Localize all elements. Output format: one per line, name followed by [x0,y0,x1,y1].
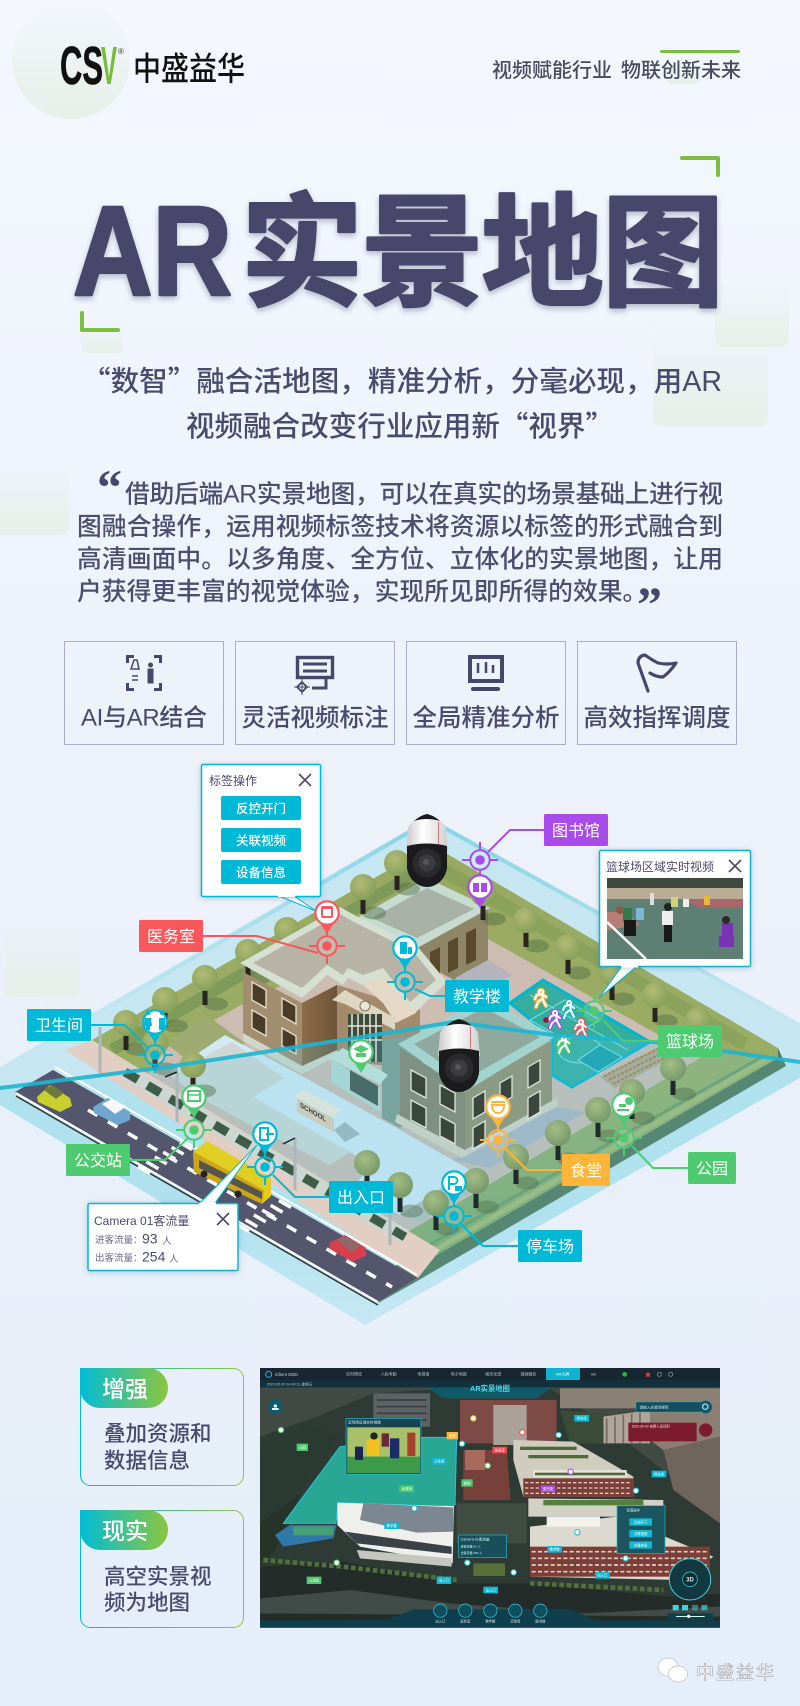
police car [93,1098,130,1125]
logo: V [101,36,117,96]
search bar [636,1402,705,1412]
map tags: 操场 [464,1480,471,1485]
map tags: 出入口 [597,1573,607,1578]
marker: 学校 [349,1040,373,1073]
3D compass [669,1559,711,1600]
panel: 增强: 叠加资源和 [104,1422,212,1446]
screen title: AR实景地图 [470,1384,510,1393]
callout: Camera 01客流量: 人 [162,1236,172,1247]
vehicles [37,1085,366,1262]
marker: 图书馆: 图书馆 [552,822,600,840]
back row trees [113,850,721,1076]
white building [337,1503,454,1563]
marker: 公园 [606,1093,736,1184]
panel: 现实: 频为地图 [104,1591,190,1615]
map tags: 教学楼 [550,1547,560,1552]
road and ground [260,1562,720,1628]
camera flow popup [459,1535,507,1558]
software screenshot: 3D [686,1578,694,1584]
camera: front [438,1019,480,1092]
map tags: 教学楼 [387,1523,397,1528]
courtyard [170,1035,470,1215]
software screenshot: 实时预览 [346,1371,362,1377]
button: 设备信息 [221,860,301,884]
slogan [492,50,741,82]
software screenshot: 请输入关键词搜索 [639,1404,669,1409]
panel: 灵活视频标注: 灵活视频标注 [242,704,388,732]
map tags: 公交站 [309,1578,320,1583]
marker: 图书馆 [462,814,608,908]
road [15,1040,440,1305]
tinted overlay below horizon line [0,1022,800,1325]
building: front green [395,998,558,1158]
marker: 公交站 [66,1085,212,1176]
camera: back [406,814,448,887]
map tags: 食堂 [449,1433,456,1438]
software screenshot: 2023-06-02 告警人员识别 [632,1423,670,1428]
callout: Camera 01客流量: 人 [169,1254,179,1265]
icon: wechat [658,1658,688,1682]
fence [125,1072,405,1237]
sports field [283,1437,457,1523]
map tags: 医务室 [495,1447,505,1452]
tab [80,1510,168,1550]
callout: 篮球场区域实时视频: 篮球场区域实时视频 [606,860,714,874]
map tags [297,1415,666,1593]
marker: 卫生间 [27,1009,173,1073]
software screenshot: 标签操作 [627,1508,641,1513]
software screenshot: 电视墙 [417,1371,429,1377]
car red [329,1235,366,1262]
island base [90,845,786,1303]
marker: 篮球场: 篮球场 [666,1033,714,1051]
connector wall [382,1035,425,1128]
windows left wall [252,982,296,1054]
watermark [658,1658,774,1683]
panel: 高效指挥调度 [578,642,736,744]
top bar [260,1368,720,1380]
bottom nav [260,1609,720,1628]
quote mark open: “ [97,459,122,515]
button: 反控开门 [221,796,301,820]
software screenshot: 图书馆 [535,1618,546,1623]
icon: AI person [128,656,160,690]
school sign [293,1090,360,1142]
map tags: 停车场 [577,1416,587,1421]
school sign: SCHOOL [300,1102,327,1124]
map tags: 图书馆 [543,1486,554,1491]
software screenshot: 医务室 [460,1618,471,1623]
basketball court [510,980,676,1088]
marker: 停车场 [436,1171,582,1262]
button: 反控开门: 反控开门 [236,801,286,816]
tab [80,1368,168,1408]
callout: Camera 01客流量: 进客流量： [95,1234,143,1246]
pavement [135,912,700,1245]
isometric map [0,764,800,1325]
callout: Camera 01客流量 [88,1145,257,1270]
callout: Camera 01客流量: 254 [142,1248,166,1264]
logo: CS [60,36,103,96]
alarm [628,1423,697,1441]
map tags: 出入口 [439,1578,449,1583]
marker: 出入口: 出入口 [337,1189,385,1207]
video window [346,1418,421,1474]
title: AR [73,180,232,322]
city background [260,1387,720,1523]
panel: 全局精准分析: 全局精准分析 [412,704,560,732]
horizon scan line [0,1022,800,1088]
software screenshot: 反控开门 [634,1519,648,1524]
panel: 增强 [80,1368,244,1486]
software screenshot: Camera 01客流量 [461,1536,490,1541]
marker: 停车场: 停车场 [526,1238,574,1256]
intro paragraph: 借助后端AR实景地图，可以在真实的场景基础上进行视 [125,480,723,508]
centre buildings [460,1400,557,1443]
software screenshot: 足球场 [510,1618,521,1623]
slogan: 视频赋能行业 [492,59,612,82]
button: 关联视频 [221,828,301,852]
subtitle: 视频融合改变行业应用新“视界” [186,404,614,445]
watermark: 中盛益华 [696,1663,774,1683]
marker: 篮球场 [576,993,722,1057]
callout: Camera 01客流量: Camera 01客流量 [94,1213,189,1228]
intro paragraph: 图融合操作，运用视频标签技术将资源以标签的形式融合到 [77,513,723,541]
software screenshot: AB [591,1372,596,1377]
software screenshot: AR大屏 [556,1371,569,1377]
panel: 灵活视频标注 [236,642,394,744]
marker: 教学楼: 教学楼 [453,988,501,1006]
panel: 现实: 现实 [102,1518,148,1544]
software screenshot: 出入口 [435,1618,445,1623]
panel: AI与AR结合 [64,642,224,744]
map tags: 出入口 [486,1587,496,1592]
subtitle: “数智”融合活地图，精准分析，分毫必现，用AR [82,359,722,400]
logo [60,36,245,96]
callout: Camera 01客流量: 出客流量： [95,1252,143,1264]
software screenshot: 图形化流 [485,1371,501,1377]
callout: 篮球场区域实时视频 [599,850,750,998]
marker: 公园: 公园 [696,1161,728,1178]
map tags: 公园 [299,1445,306,1450]
players [535,990,586,1053]
porch [331,1060,380,1112]
marker: 出入口 [247,1122,393,1213]
panel: 增强: 增强 [102,1376,148,1402]
software screenshot: 教学楼 [485,1618,496,1623]
front row trees [180,1052,696,1236]
marker: 公交站: 公交站 [74,1152,122,1170]
map plane [0,817,800,1325]
marker: 医务室: 医务室 [147,928,195,946]
logo: ® [118,47,124,56]
callout: 标签操作: 标签操作 [209,773,257,788]
title: 实景地图 [241,186,724,322]
intro paragraph: 户获得更丰富的视觉体验，实现所见即所得的效果。 [77,578,647,606]
icon: video tag [294,658,332,695]
bus [193,1141,271,1204]
callout: Camera 01客流量: 93 [142,1230,158,1246]
software screenshot: 设备信息 [634,1542,648,1547]
marker: 食堂: 食堂 [570,1162,602,1180]
icon: analytics screen [470,657,502,689]
marker: 食堂 [480,1095,610,1186]
panel: AI与AR结合: AI与AR结合 [81,704,207,732]
marker: 医务室 [139,901,345,964]
marker: 卫生间: 卫生间 [35,1017,83,1035]
icon: flag [638,655,676,691]
map tags: 停车场 [654,1471,665,1476]
slogan: 物联创新未来 [621,59,741,82]
building: main brown [240,907,447,1128]
marker: 教学楼 [387,936,509,1012]
intro paragraph [77,480,723,606]
software screenshot: 出客流量 254 人 [461,1550,482,1555]
decorative pale shapes [0,1,789,1035]
panel: 现实: 高空实景视 [104,1565,212,1589]
software screenshot: 视频融合 [520,1371,536,1377]
street lamps [100,1027,390,1245]
panel: 现实 [80,1510,244,1628]
map tags: 足球场 [402,1486,412,1491]
logo: 中盛益华 [133,51,245,87]
software screenshot: 2023-05-26 14:49:11 星期五 [267,1381,313,1386]
intro paragraph: 高清画面中。以多角度、全方位、立体化的实景地图，让用 [77,546,723,574]
software screenshot: 足球场区域实时视频 [348,1420,381,1425]
software screenshot: 电子地图 [451,1371,467,1377]
callout: 标签操作 [202,764,320,911]
quote mark close: ” [637,576,662,632]
subtitle [82,359,722,445]
software screenshot: 进客流量 93 人 [461,1544,481,1549]
bracket: bottom left [82,313,118,330]
panel: 增强: 数据信息 [104,1449,190,1473]
software screenshot: 关联视频 [634,1531,648,1536]
software screenshot: 人脸考勤 [381,1371,397,1377]
button: 关联视频: 关联视频 [236,834,286,848]
building: back wing [357,878,512,993]
car yellow [37,1085,72,1112]
software screenshot: iClient 8200 [275,1372,298,1377]
software screenshot [260,1368,720,1628]
panel: 高效指挥调度: 高效指挥调度 [584,704,730,732]
video frame [607,878,743,959]
panel: 全局精准分析 [406,642,566,744]
bracket: top right [682,158,718,175]
map tags: 卫生间 [434,1459,445,1464]
tag operation popup [617,1506,665,1554]
button: 设备信息: 设备信息 [236,865,286,880]
